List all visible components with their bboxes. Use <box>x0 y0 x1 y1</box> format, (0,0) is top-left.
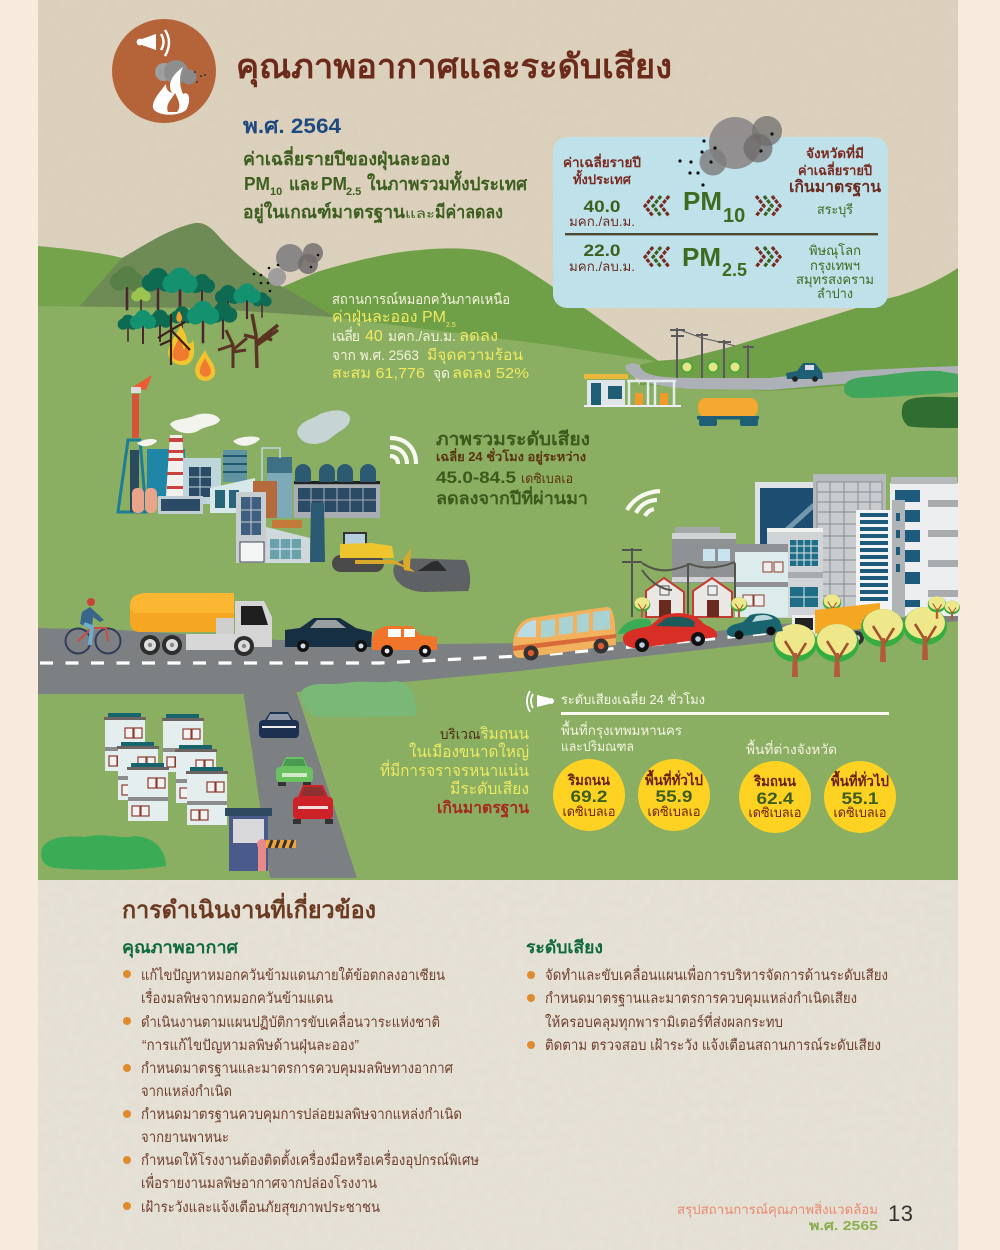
power lines <box>622 548 735 620</box>
orange car <box>372 626 437 657</box>
text: roadside statement: มีระดับเสียง <box>450 780 529 798</box>
items: ดำเนินงานตามแผนปฏิบัติการขับเคลื่อนวาระแห่งชาติ <box>141 1012 440 1031</box>
landscape scene <box>38 223 958 880</box>
divider row <box>565 233 878 235</box>
paper panel <box>38 0 958 880</box>
label: Bangkok area: และปริมณฑล <box>561 739 634 754</box>
smoke over mountain <box>253 243 323 292</box>
text: northern haze situation: จาก พ.ศ. 2563 <box>332 347 419 363</box>
smokestack <box>166 435 186 496</box>
label: provinces: พื้นที่ต่างจังหวัด <box>746 739 837 757</box>
text: northern haze situation: ลดลง 52% <box>452 365 529 382</box>
tank hall <box>294 481 380 518</box>
right column: provinces: ลำปาง <box>817 286 853 301</box>
label PM10: PM <box>683 186 722 216</box>
summary text: 10 <box>270 186 282 198</box>
icon: section emblem <box>112 19 216 123</box>
text: northern haze situation: เฉลี่ย <box>332 327 360 344</box>
right column: provinces: พิษณุโลก <box>809 243 861 259</box>
items: เฝ้าระวังและแจ้งเตือนภัยสุขภาพประชาชน <box>141 1199 380 1216</box>
bare trees <box>218 330 247 368</box>
bullets <box>123 970 131 1210</box>
road dashes <box>40 630 800 663</box>
badge: provinces roadside: ริมถนน <box>753 773 796 789</box>
label PM2.5: PM <box>682 242 721 272</box>
flames <box>176 311 182 322</box>
text: noise overview: เฉลี่ย 24 ชั่วโมง อยู่ระหว่าง <box>436 448 586 465</box>
factory illustration <box>118 375 380 563</box>
forest fire illustration <box>110 266 278 381</box>
right column: provinces: เกินมาตรฐาน <box>789 178 881 197</box>
text: northern haze situation: มีจุดความร้อน <box>427 347 523 365</box>
teal car <box>727 613 783 640</box>
text: northern haze situation: ค่าฝุ่นละออง PM <box>332 309 446 327</box>
left column: national average: ค่าเฉลี่ยรายปี <box>563 153 641 170</box>
items: เพื่อรายงานมลพิษอากาศจากปล่องโรงงาน <box>141 1173 377 1192</box>
left column: national average: ทั้งประเทศ <box>573 169 632 187</box>
badge: Bangkok roadside <box>553 759 625 831</box>
dirt patch <box>393 559 470 592</box>
footer <box>677 1201 913 1233</box>
hill: far right <box>640 268 958 420</box>
city buildings <box>672 474 958 619</box>
forest trees <box>110 266 272 344</box>
body <box>340 543 394 558</box>
label: Bangkok area <box>561 720 682 754</box>
bush: lower left <box>41 835 166 870</box>
text: noise overview: ภาพรวมระดับเสียง <box>436 429 590 449</box>
left column: national average: มคก./ลบ.ม. <box>569 214 635 229</box>
tanker truck right <box>792 603 880 645</box>
badge: provinces roadside: 62.4 <box>756 789 794 808</box>
items: จากยานพาหนะ <box>141 1130 229 1146</box>
footer: สรุปสถานการณ์คุณภาพสิ่งแวดล้อม <box>677 1201 878 1218</box>
right column: provinces: ค่าเฉลี่ยรายปี <box>798 161 872 178</box>
badge: provinces general <box>824 761 896 833</box>
track <box>332 555 384 572</box>
right column: provinces: จังหวัดที่มี <box>806 144 864 161</box>
bush: behind red car <box>618 619 655 634</box>
bus <box>513 607 616 660</box>
text: noise overview: ลดลงจากปีที่ผ่านมา <box>436 486 588 508</box>
derrick <box>118 440 146 512</box>
gas station <box>584 374 681 407</box>
small tree behind truck <box>823 594 841 617</box>
grey grid tower <box>813 474 886 619</box>
badge: Bangkok general: พื้นที่ทั่วไป <box>645 769 703 788</box>
icon: sound waves left <box>390 438 416 464</box>
badge: provinces general: 55.1 <box>842 789 878 808</box>
icon: sound waves right <box>627 491 660 516</box>
text: northern haze situation: สะสม 61,776 <box>332 365 425 382</box>
text: roadside statement: ที่มีการจราจรหนาแน่น <box>380 759 529 780</box>
cab <box>344 533 366 548</box>
badge: provinces general: เดซิเบลเอ <box>834 805 886 820</box>
text: northern haze situation: มคก./ลบ.ม. <box>388 328 456 344</box>
summary text: อยู่ในเกณฑ์มาตรฐาน <box>243 201 406 224</box>
badge: Bangkok roadside: เดซิเบลเอ <box>562 804 616 819</box>
items <box>545 965 888 1054</box>
text: northern haze situation: 40 <box>365 328 383 345</box>
items: กำหนดมาตรฐานและมาตรการควบคุมมลพิษทางอากาศ <box>141 1061 454 1077</box>
badge: provinces roadside: เดซิเบลเอ <box>748 805 802 820</box>
list: air quality <box>122 938 479 1216</box>
icon: speaker <box>527 691 554 712</box>
side road <box>243 690 357 878</box>
red car front <box>293 785 333 824</box>
heading: noise levels: ระดับเสียงเฉลี่ย 24 ชั่วโมง <box>561 691 705 707</box>
red car <box>623 613 717 652</box>
text: northern haze situation: สถานการณ์หมอกควันภาคเหนือ <box>332 291 510 307</box>
badge: Bangkok general: เดซิเบลเอ <box>648 804 700 819</box>
main road <box>38 615 958 694</box>
items: ติดตาม ตรวจสอบ เฝ้าระวัง แจ้งเตือนสถานการณ์ระดับเสียง <box>545 1037 881 1054</box>
items: กำหนดมาตรฐานและมาตรการควบคุมแหล่งกำเนิดเสียง <box>545 990 857 1007</box>
summary text: PM <box>244 174 270 194</box>
text: roadside statement: ในเมืองขนาดใหญ่ <box>409 742 529 761</box>
hill: light left <box>38 246 122 312</box>
left column: national average: 40.0 <box>584 197 620 216</box>
text: northern haze situation <box>332 291 529 382</box>
green car front <box>276 757 313 786</box>
small tree by houses <box>634 597 650 617</box>
items: แก้ไขปัญหาหมอกควันข้ามแดนภายใต้ข้อตกลงอาเซียน <box>141 966 445 984</box>
panel: PM blue table <box>553 116 888 308</box>
summary text <box>243 146 528 224</box>
badge: provinces roadside <box>739 761 811 833</box>
tank wagon <box>697 398 759 426</box>
footer: 13 <box>888 1201 913 1226</box>
main ground <box>38 306 958 880</box>
footer: พ.ศ. 2565 <box>809 1218 878 1233</box>
rule <box>561 712 889 715</box>
items: กำหนดมาตรฐานควบคุมการปล่อยมลพิษจากแหล่งกำเนิด <box>141 1107 462 1123</box>
left column: national average: 22.0 <box>584 241 620 260</box>
left column: national average <box>563 153 641 274</box>
summary text: ค่าเฉลี่ยรายปีของฝุ่นละออง <box>243 146 450 171</box>
label: Bangkok area: พื้นที่กรุงเทพมหานคร <box>561 720 682 739</box>
badge: Bangkok roadside: ริมถนน <box>567 772 610 788</box>
bush: dark right <box>902 397 958 428</box>
bulldozer <box>332 533 470 592</box>
distant road <box>625 363 958 390</box>
right column: provinces <box>789 144 881 301</box>
bush: far right <box>844 371 958 398</box>
items: กำหนดให้โรงงานต้องติดตั้งเครื่องมือหรือเครื่องอุปกรณ์พิเศษ <box>141 1149 479 1169</box>
subheading: ระดับเสียง <box>526 937 603 957</box>
red-roof houses <box>646 578 732 617</box>
items: จัดทำและขับเคลื่อนแผนเพื่อการบริหารจัดการด้านระดับเสียง <box>545 965 888 984</box>
utility poles <box>670 328 754 378</box>
items: ให้ครอบคลุมทุกพารามิเตอร์ที่ส่งผลกระทบ <box>545 1012 783 1031</box>
arrows row 2 <box>645 247 780 267</box>
label PM2.5: 2.5 <box>722 260 747 280</box>
badge: Bangkok roadside: 69.2 <box>570 787 608 806</box>
bush: by road <box>302 681 417 717</box>
mid block <box>767 528 823 618</box>
label PM10 <box>683 186 745 227</box>
front block <box>236 492 266 563</box>
title: คุณภาพอากาศและระดับเสียง <box>236 48 672 88</box>
items: “การแก้ไขปัญหามลพิษด้านฝุ่นละออง” <box>142 1036 359 1054</box>
badge: provinces general: พื้นที่ทั่วไป <box>831 770 889 789</box>
dirt pile <box>417 561 447 571</box>
label PM2.5 <box>682 242 747 280</box>
heading: related actions: การดำเนินงานที่เกี่ยวข้อง <box>122 892 376 924</box>
burnt tree <box>158 314 190 365</box>
main buildings <box>183 458 221 504</box>
cyclist <box>66 598 120 654</box>
summary text: มีค่าลดลง <box>435 202 503 222</box>
housing estate <box>104 713 228 825</box>
distant trees <box>682 362 740 372</box>
bullets <box>527 971 535 1049</box>
arrows row 1 <box>645 196 780 216</box>
summary text: และ <box>405 206 435 221</box>
badge: Bangkok general <box>638 759 710 831</box>
label PM10: 10 <box>723 205 745 227</box>
left column: national average: มคก./ลบ.ม. <box>569 259 635 274</box>
badge: Bangkok general: 55.9 <box>656 787 692 806</box>
mountain <box>78 223 340 320</box>
text: roadside statement <box>380 726 529 818</box>
right column: provinces: สระบุรี <box>817 202 853 218</box>
striped tower <box>892 500 905 617</box>
pale building <box>735 545 788 617</box>
grey building <box>672 533 736 583</box>
gatehouse and barrier <box>225 808 296 871</box>
side road cars <box>259 712 333 824</box>
white tower right <box>890 483 958 616</box>
text: northern haze situation: จุด <box>433 365 450 382</box>
blade <box>403 548 415 572</box>
summary text: และ <box>289 174 319 194</box>
year: พ.ศ. 2564 <box>243 115 341 138</box>
text: roadside statement: เกินมาตรฐาน <box>437 799 529 818</box>
summary text: ในภาพรวมทั้งประเทศ <box>367 170 528 194</box>
text: noise overview <box>436 429 590 508</box>
hill: centre <box>275 248 660 362</box>
small tree by car <box>731 597 747 617</box>
text: noise overview: 45.0-84.5 <box>436 468 516 487</box>
summary text: PM <box>321 174 347 194</box>
items: จากแหล่งกำเนิด <box>141 1084 232 1100</box>
peach tanks <box>132 488 144 513</box>
text: noise overview: เดซิเบลเอ <box>521 471 573 486</box>
navy car <box>285 618 372 652</box>
text: northern haze situation: 2.5 <box>446 322 456 329</box>
distant car <box>786 363 823 382</box>
text: northern haze situation: ลดลง <box>459 328 498 345</box>
list: noise <box>526 937 888 1054</box>
smoke cloud <box>678 116 782 187</box>
clouds <box>170 414 220 433</box>
items: เรื่องมลพิษจากหมอกควันข้ามแดน <box>141 988 333 1007</box>
glass tower <box>755 482 817 607</box>
text: roadside statement: บริเวณริมถนน <box>440 726 529 743</box>
tanker truck left <box>130 593 272 656</box>
city roadside trees <box>773 596 960 677</box>
teal building <box>147 449 185 497</box>
navy car front <box>259 712 299 738</box>
items <box>141 966 479 1216</box>
flare stack <box>131 375 152 390</box>
lower paper panel <box>38 878 958 1250</box>
subheading: คุณภาพอากาศ <box>122 938 239 958</box>
right column: provinces: สมุทรสงคราม <box>796 272 874 288</box>
right column: provinces: กรุงเทพฯ <box>810 258 860 274</box>
summary text: 2.5 <box>346 186 361 198</box>
